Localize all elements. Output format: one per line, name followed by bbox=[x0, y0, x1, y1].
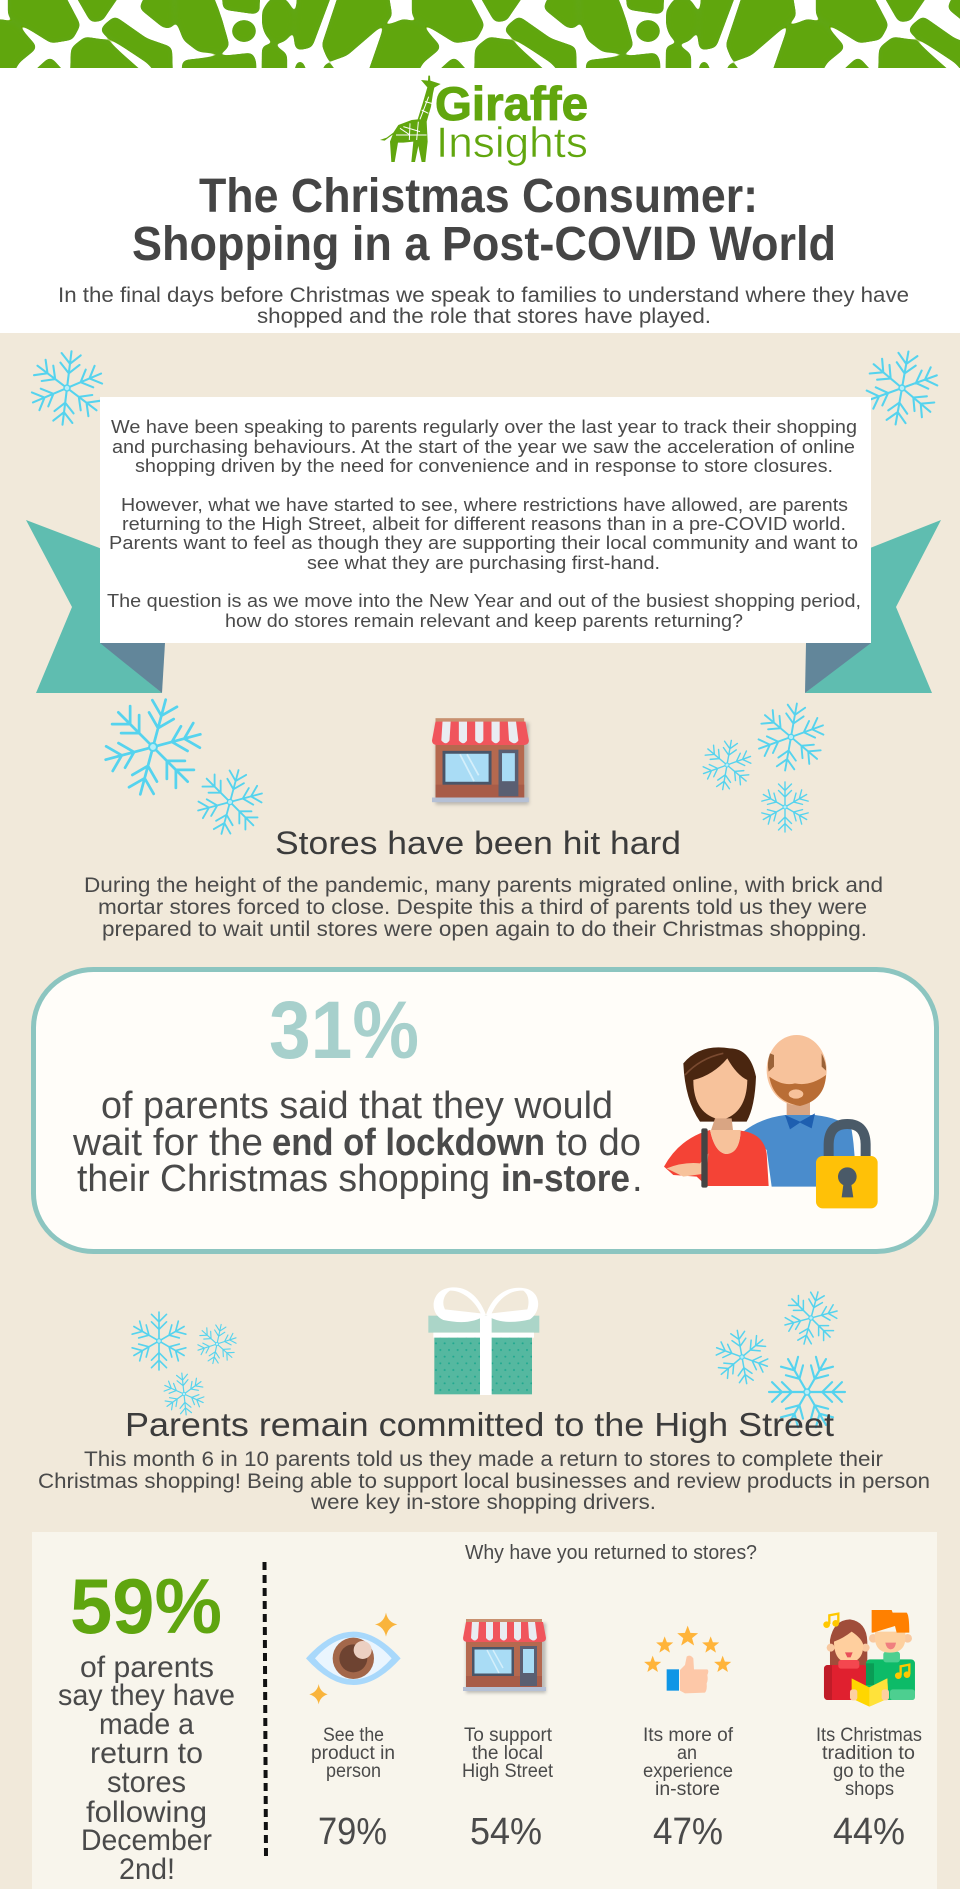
snowflakes right of store bbox=[698, 698, 830, 832]
heading: stores hit hard: Stores have been hit hard bbox=[275, 825, 681, 861]
ribbon right fold bbox=[805, 643, 871, 693]
icon: store bbox=[432, 718, 529, 805]
stat description bbox=[58, 1651, 235, 1886]
callout text: their Christmas shopping bbox=[77, 1158, 490, 1200]
stores body text: mortar stores forced to close. Despite this a third of parents told us they were bbox=[98, 896, 867, 919]
stat description: of parents bbox=[80, 1651, 214, 1684]
stores body text: prepared to wait until stores were open again to do their Christmas shopping. bbox=[102, 918, 867, 941]
ribbon right tail bbox=[805, 520, 941, 693]
title: The Christmas Consumer: bbox=[199, 170, 758, 223]
label bbox=[462, 1725, 554, 1782]
title: Shopping in a Post-COVID World bbox=[132, 218, 836, 271]
ribbon text: Parents want to feel as though they are supporting their local community and want to bbox=[109, 533, 858, 553]
logo: Giraffe Insights bbox=[380, 76, 588, 167]
label: tradition to bbox=[822, 1743, 915, 1764]
label bbox=[311, 1725, 395, 1782]
stat: 59%: 59% bbox=[70, 1562, 222, 1650]
column: local high street bbox=[462, 1619, 554, 1853]
ribbon text: returning to the High Street, albeit for different reasons than in a pre-COVID world. bbox=[122, 514, 846, 534]
ribbon left fold bbox=[100, 643, 165, 693]
header white panel bbox=[0, 0, 960, 333]
label bbox=[643, 1725, 734, 1800]
stores body text: During the height of the pandemic, many parents migrated online, with brick and bbox=[84, 874, 883, 897]
ribbon banner bbox=[26, 397, 941, 693]
parents body text bbox=[38, 1448, 930, 1514]
label: Its Christmas bbox=[816, 1725, 922, 1746]
icon: eye bbox=[306, 1613, 401, 1704]
label: High Street bbox=[462, 1761, 554, 1782]
stores body text bbox=[84, 874, 883, 941]
icon: store bbox=[463, 1619, 546, 1693]
icon: gift bbox=[428, 1287, 539, 1395]
icon: couple with padlock bbox=[664, 1035, 878, 1208]
snowflakes left of gift bbox=[130, 1312, 241, 1417]
question heading: Why have you returned to stores? bbox=[465, 1542, 757, 1564]
ribbon text: However, what we have started to see, where restrictions have allowed, are parents bbox=[121, 495, 848, 515]
stat description: following bbox=[86, 1796, 207, 1829]
ribbon text: We have been speaking to parents regularly over the last year to track their shopping bbox=[111, 417, 857, 437]
stat description: 2nd! bbox=[119, 1853, 175, 1886]
stat: 31%: 31% bbox=[269, 985, 419, 1076]
callout text: of parents said that they would bbox=[101, 1085, 613, 1127]
ribbon text: shopping driven by the need for convenience and in response to store closures. bbox=[135, 456, 833, 476]
callout text bbox=[72, 1085, 643, 1200]
intro text: shopped and the role that stores have played. bbox=[257, 305, 711, 328]
callout text: in-store bbox=[501, 1158, 630, 1200]
ribbon white panel bbox=[100, 397, 871, 643]
column: see the product bbox=[306, 1613, 401, 1853]
value 79%: 79% bbox=[318, 1811, 387, 1853]
dotted divider bbox=[264, 1562, 266, 1858]
ribbon text: The question is as we move into the New Year and out of the busiest shopping period, bbox=[107, 591, 861, 611]
ribbon text: and purchasing behaviours. At the start of the year we saw the acceleration of online bbox=[112, 437, 855, 457]
label: See the bbox=[323, 1725, 384, 1746]
label: an bbox=[677, 1743, 697, 1764]
label bbox=[816, 1725, 922, 1800]
ribbon text: how do stores remain relevant and keep parents returning? bbox=[225, 611, 743, 631]
callout text: wait for the bbox=[72, 1122, 263, 1164]
ribbon text bbox=[107, 417, 861, 631]
icon: carol singers bbox=[823, 1610, 915, 1707]
stat description: made a bbox=[99, 1708, 194, 1741]
label: experience bbox=[643, 1761, 733, 1782]
title bbox=[132, 170, 836, 271]
label: product in bbox=[311, 1743, 395, 1764]
heading: parents committed: Parents remain committed to the High Street bbox=[125, 1406, 834, 1443]
label: the local bbox=[472, 1743, 543, 1764]
callout text: end of lockdown bbox=[272, 1122, 545, 1164]
icon: giraffe bbox=[380, 76, 441, 162]
ribbon text: see what they are purchasing first-hand. bbox=[307, 553, 660, 573]
logo word Giraffe: Giraffe bbox=[435, 77, 588, 130]
icon: snowflake top right bbox=[859, 345, 945, 431]
parents body text: were key in-store shopping drivers. bbox=[310, 1491, 656, 1514]
stat description: December bbox=[81, 1824, 212, 1857]
stat description: stores bbox=[107, 1766, 186, 1799]
header giraffe pattern bbox=[0, 0, 960, 68]
snowflakes left of store bbox=[93, 687, 270, 842]
intro text bbox=[58, 284, 909, 328]
value 44%: 44% bbox=[833, 1811, 905, 1853]
intro text: In the final days before Christmas we speak to families to understand where they have bbox=[58, 284, 909, 307]
icon: thumb and stars bbox=[644, 1626, 731, 1693]
label: Its more of bbox=[643, 1725, 734, 1746]
panel: 31 percent callout bbox=[34, 970, 936, 1252]
value 47%: 47% bbox=[653, 1811, 723, 1853]
logo word Insights: Insights bbox=[436, 119, 588, 167]
parents body text: Christmas shopping! Being able to support local businesses and review products in person bbox=[38, 1470, 930, 1493]
stat description: return to bbox=[90, 1737, 203, 1770]
ribbon left tail bbox=[26, 520, 162, 693]
snowflakes right of gift bbox=[711, 1285, 859, 1444]
panel: returned to stores bbox=[32, 1532, 937, 1889]
callout text: . bbox=[632, 1158, 643, 1200]
label: go to the bbox=[833, 1761, 905, 1782]
label: in-store bbox=[655, 1779, 720, 1800]
column: christmas tradition bbox=[816, 1610, 922, 1853]
value 54%: 54% bbox=[470, 1811, 542, 1853]
icon: snowflake top left bbox=[26, 347, 108, 429]
label: shops bbox=[845, 1779, 894, 1800]
stat description: say they have bbox=[58, 1679, 235, 1712]
label: person bbox=[326, 1761, 381, 1782]
callout text: to do bbox=[556, 1122, 641, 1164]
parents body text: This month 6 in 10 parents told us they made a return to stores to complete their bbox=[84, 1448, 883, 1471]
label: To support bbox=[464, 1725, 553, 1746]
column: experience bbox=[643, 1626, 734, 1853]
